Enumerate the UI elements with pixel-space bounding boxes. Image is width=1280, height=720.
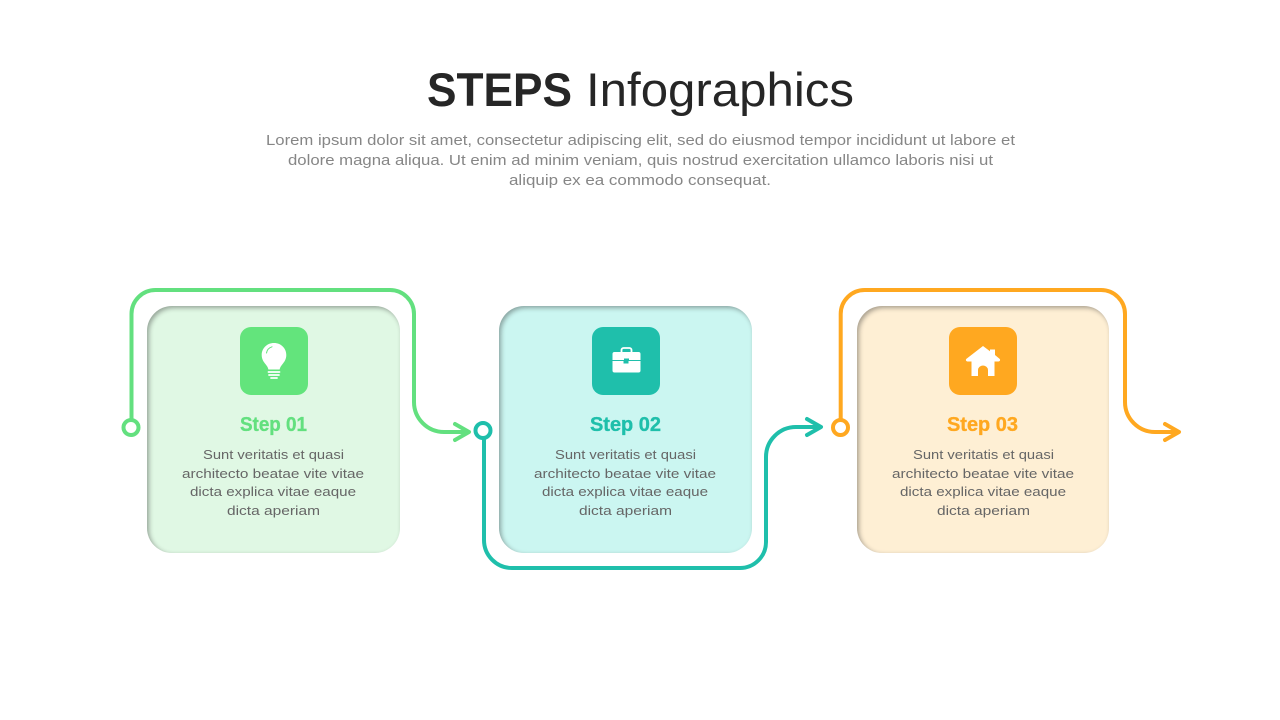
arrow: step 02 connector — [474, 416, 824, 570]
text block: step 02 description: Sunt veritatis et quasi — [555, 447, 696, 462]
heading: step 03: Step 03 — [947, 414, 1018, 436]
panel: step 02 — [499, 306, 752, 553]
icon: house — [949, 327, 1017, 395]
text block: step 03 description: Sunt veritatis et quasi — [913, 447, 1054, 462]
text block: step 03 description: dicta explica vitae eaque — [900, 484, 1066, 499]
text block: step 02 description: dicta explica vitae eaque — [542, 484, 708, 499]
text block: step 03 description: dicta aperiam — [937, 503, 1030, 518]
icon: light bulb — [240, 327, 308, 395]
text block: step 02 description — [534, 447, 716, 518]
panel: step 03 — [857, 306, 1109, 553]
heading: step 02: Step 02 — [590, 414, 661, 436]
arrow: step 03 connector — [831, 288, 1182, 442]
text block: step 01 description: dicta explica vitae eaque — [190, 484, 356, 499]
text block: step 02 description: dicta aperiam — [579, 503, 672, 518]
arrow: step 01 connector — [122, 288, 472, 442]
subtitle text block: dolore magna aliqua. Ut enim ad minim veniam, quis nostrud exercitation ullamco laboris nisi ut — [288, 152, 994, 169]
subtitle text block — [266, 132, 1016, 189]
text block: step 01 description — [182, 447, 364, 518]
title: Infographics — [586, 63, 854, 116]
text block: step 01 description: architecto beatae vite vitae — [182, 466, 364, 481]
panel: step 01 — [147, 306, 400, 553]
heading: step 01: Step 01 — [240, 414, 307, 436]
text block: step 01 description: Sunt veritatis et quasi — [203, 447, 344, 462]
text block: step 01 description: dicta aperiam — [227, 503, 320, 518]
text block: step 03 description: architecto beatae vite vitae — [892, 466, 1074, 481]
title: STEPS — [427, 63, 572, 116]
title — [427, 63, 854, 116]
icon: briefcase — [592, 327, 660, 395]
text block: step 02 description: architecto beatae vite vitae — [534, 466, 716, 481]
subtitle text block: Lorem ipsum dolor sit amet, consectetur adipiscing elit, sed do eiusmod tempor incididunt ut labore et — [266, 132, 1016, 149]
text block: step 03 description — [892, 447, 1074, 518]
subtitle text block: aliquip ex ea commodo consequat. — [509, 172, 771, 189]
